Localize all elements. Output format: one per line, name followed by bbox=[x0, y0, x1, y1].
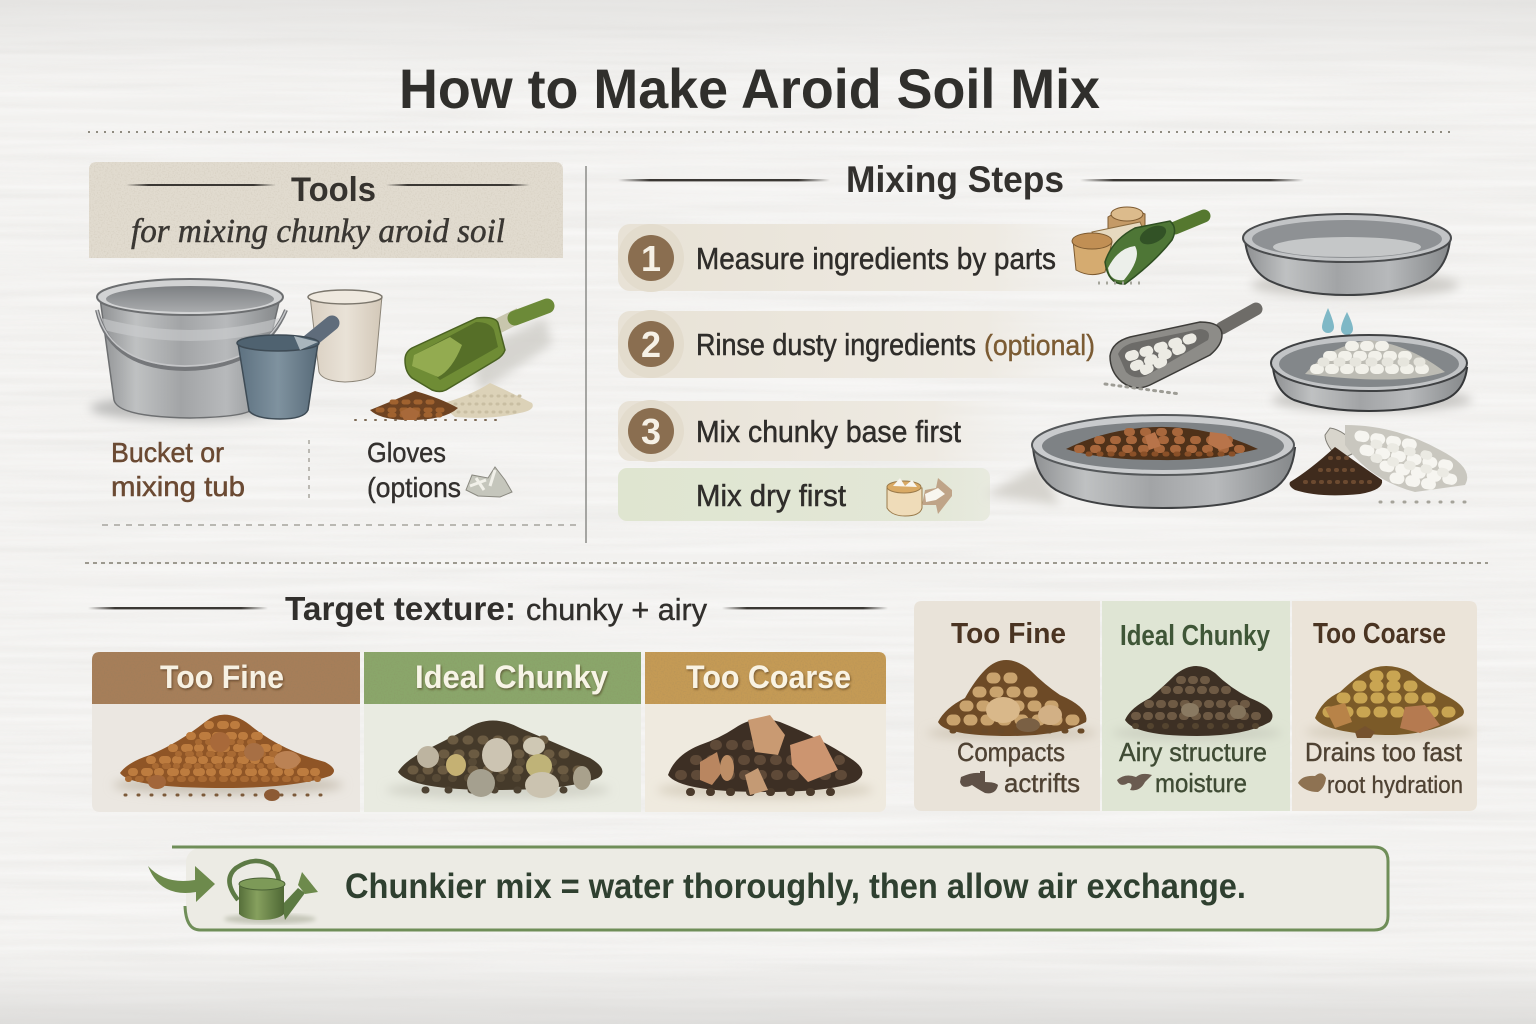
icon: root shape bbox=[1298, 773, 1326, 792]
panel: texture comparison cards bbox=[92, 652, 886, 812]
step 1: Measure ingredients by parts bbox=[696, 241, 1056, 276]
title: How to Make Aroid Soil Mix bbox=[399, 57, 1100, 120]
label: gloves options: Gloves bbox=[367, 437, 446, 468]
step 1 bbox=[618, 224, 1118, 292]
outcome: too coarse bbox=[1292, 601, 1477, 811]
outcome: too coarse: Drains too fast bbox=[1305, 737, 1463, 767]
pile bbox=[1305, 666, 1475, 740]
label: bucket or mixing tub: mixing tub bbox=[111, 471, 245, 502]
icon: soil and sand piles bbox=[355, 383, 533, 420]
icon: green scoop bbox=[405, 306, 552, 392]
outcome: too fine: Too Fine bbox=[951, 618, 1066, 650]
step 2: Rinse dusty ingredients bbox=[696, 327, 976, 362]
icon: empty pan bbox=[1243, 214, 1459, 298]
icon: bowl of rinsed perlite bbox=[1271, 335, 1472, 412]
outcome: too fine: Compacts bbox=[957, 737, 1065, 767]
panel: mixing steps bbox=[618, 159, 1472, 521]
callout: watering advice: Chunkier mix = water thoroughly, then allow air exchange. bbox=[345, 867, 1246, 906]
label: bucket or mixing tub bbox=[111, 437, 245, 502]
heading: mixing steps: Mixing Steps bbox=[846, 159, 1064, 200]
heading: target texture bbox=[88, 590, 888, 627]
pile: too fine bbox=[113, 715, 343, 801]
card: too coarse bbox=[645, 652, 886, 812]
label: bucket or mixing tub: Bucket or bbox=[111, 437, 224, 468]
callout: mix dry first: Mix dry first bbox=[696, 478, 846, 513]
icon: measuring cups and scoop bbox=[1072, 207, 1204, 284]
card: too coarse: Too Coarse bbox=[686, 659, 851, 695]
icon: curved arrow bbox=[148, 866, 215, 902]
step 1: 1 bbox=[641, 238, 661, 279]
panel: texture outcomes bbox=[914, 601, 1477, 811]
card: too fine bbox=[92, 652, 360, 812]
icon: cream cup bbox=[308, 290, 382, 382]
icon: root shape bbox=[1117, 774, 1152, 790]
icon: root shape bbox=[960, 771, 998, 793]
card: ideal chunky bbox=[364, 652, 641, 812]
pile bbox=[1112, 666, 1282, 741]
card: too fine: Too Fine bbox=[160, 659, 284, 695]
outcome: ideal chunky: moisture bbox=[1155, 768, 1247, 798]
tools header band: Tools bbox=[291, 171, 376, 209]
outcome: too coarse: Too Coarse bbox=[1313, 618, 1446, 650]
label: gloves options: (options bbox=[367, 472, 461, 503]
tools header band bbox=[89, 162, 563, 258]
icon: spilled soil and perlite bbox=[1290, 425, 1470, 502]
tools header band: for mixing chunky aroid soil bbox=[131, 213, 505, 250]
step 2: 2 bbox=[641, 324, 661, 365]
icon: metal bucket bbox=[90, 279, 290, 421]
callout: watering advice bbox=[148, 847, 1388, 930]
outcome: ideal chunky: Airy structure bbox=[1119, 737, 1267, 767]
outcome: too fine bbox=[914, 601, 1100, 811]
icon: small stones bbox=[466, 467, 512, 497]
step 3 bbox=[618, 400, 1038, 462]
pile: too coarse bbox=[657, 715, 873, 799]
step 2 bbox=[618, 310, 1108, 378]
card: ideal chunky: Ideal Chunky bbox=[415, 659, 608, 695]
heading: target texture: Target texture: bbox=[285, 590, 516, 627]
step 2: (optional) bbox=[984, 330, 1095, 362]
icon: water drops bbox=[1322, 308, 1353, 335]
icon: cup and arrow bbox=[887, 478, 952, 516]
callout: mix dry first bbox=[618, 468, 990, 521]
label: gloves options bbox=[367, 437, 461, 503]
heading: target texture: chunky + airy bbox=[526, 592, 707, 627]
outcome: too coarse: root hydration bbox=[1327, 772, 1463, 799]
panel: tools bbox=[89, 162, 580, 525]
icon: blue scoop cup bbox=[237, 323, 332, 419]
icon: watering can bbox=[224, 861, 318, 924]
step 3: 3 bbox=[641, 411, 661, 452]
outcome: ideal chunky: Ideal Chunky bbox=[1120, 620, 1270, 652]
pile: ideal chunky bbox=[386, 720, 610, 799]
pile bbox=[927, 660, 1097, 741]
icon: large mixing bowl with soil bbox=[985, 415, 1295, 508]
icon: scoop of perlite bbox=[1105, 309, 1256, 394]
step 3: Mix chunky base first bbox=[696, 414, 961, 449]
outcome: too fine: actrifts bbox=[1004, 768, 1080, 798]
outcome: ideal chunky bbox=[1102, 601, 1290, 811]
